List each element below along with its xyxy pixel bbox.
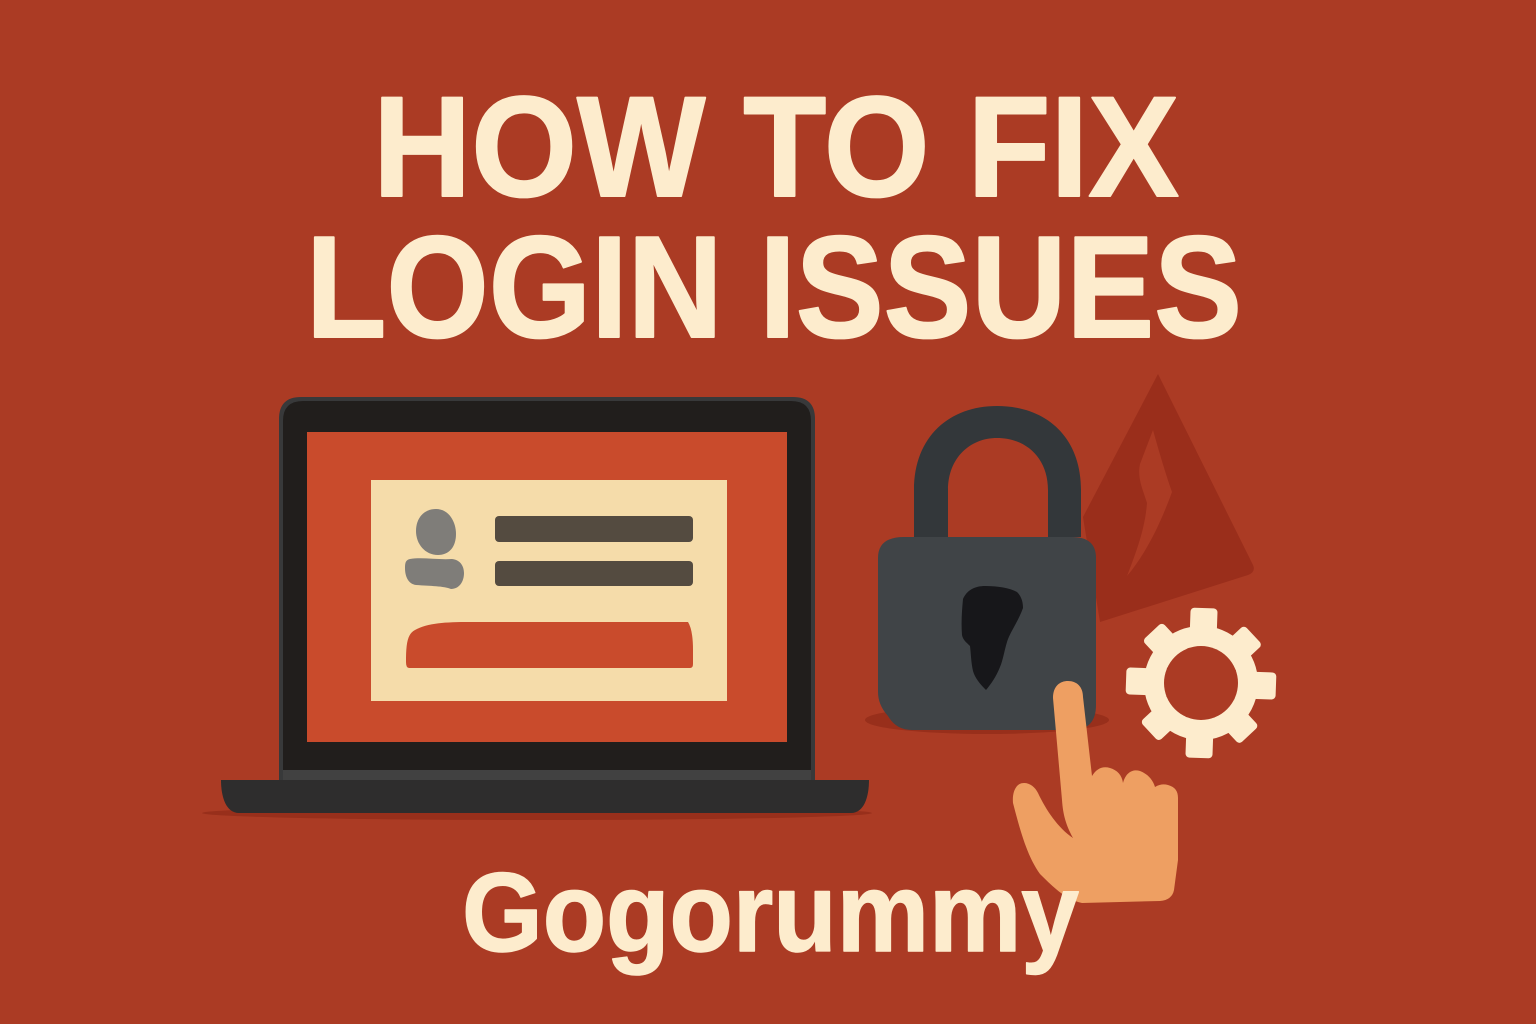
title: HOW TO FIX	[373, 68, 1179, 227]
keyhole	[962, 586, 1023, 690]
login card	[371, 480, 727, 701]
login button	[406, 622, 693, 668]
icon: gear	[1123, 605, 1279, 761]
brand name: Gogorummy	[462, 850, 1079, 975]
icon: padlock	[865, 406, 1109, 734]
user avatar	[405, 509, 464, 589]
shackle	[914, 406, 1081, 537]
laptop base	[221, 780, 869, 813]
icon: warning triangle	[1083, 374, 1254, 622]
username field	[495, 516, 693, 542]
password field	[495, 561, 693, 586]
title	[306, 68, 1242, 368]
icon: pointing hand	[1013, 681, 1178, 903]
icon: laptop with login form	[202, 397, 872, 820]
title: LOGIN ISSUES	[306, 206, 1242, 368]
laptop screen	[307, 432, 787, 742]
laptop lid	[279, 397, 815, 780]
lock body	[878, 537, 1096, 730]
